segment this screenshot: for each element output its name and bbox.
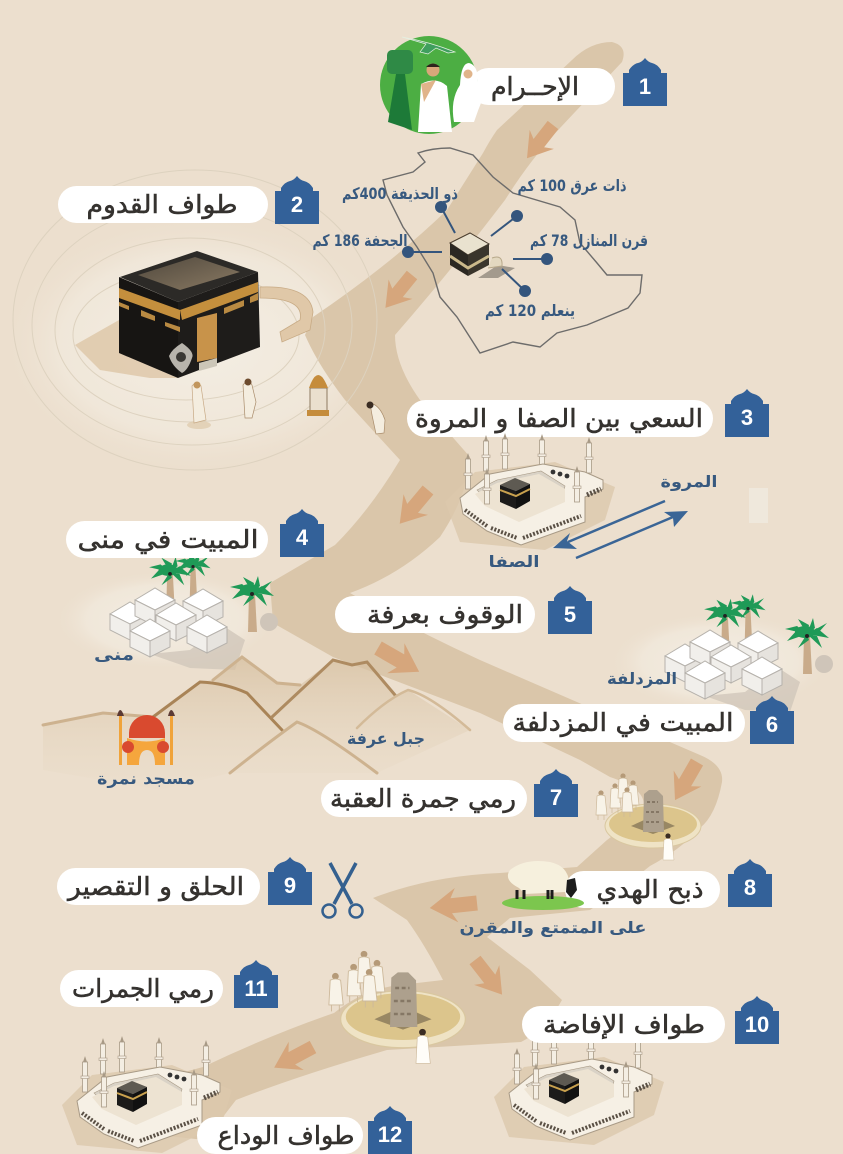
pilgrimage route path — [110, 42, 722, 1140]
map of miqat distances: ذو الحذيفة 400كم — [342, 184, 458, 203]
faint mark — [749, 488, 768, 523]
icon: scissors — [322, 863, 362, 918]
badge: 8: 8 — [744, 875, 756, 900]
badge: 3: 3 — [741, 405, 753, 430]
tawaf circles around the Kaaba — [13, 170, 377, 470]
badge: 1: 1 — [639, 74, 651, 99]
pill: step 2 — [58, 186, 268, 223]
pill: step 4: المبيت في منى — [78, 525, 258, 554]
jamarat small — [596, 773, 701, 860]
map of miqat distances — [312, 148, 648, 353]
pill: step 6 — [503, 704, 745, 742]
badge: 10: 10 — [745, 1012, 769, 1037]
badge: 9 — [268, 857, 312, 905]
map of miqat distances: الجحفة 186 كم — [312, 231, 408, 250]
note under step 8: على المتمتع والمقرن — [460, 918, 646, 937]
pill: step 7 — [321, 780, 527, 817]
badge: 2: 2 — [291, 192, 303, 217]
pill: step 10: طواف الإفاضة — [543, 1010, 705, 1039]
badge: 6 — [750, 696, 794, 744]
badge: 2 — [275, 176, 319, 224]
badge: 10 — [735, 996, 779, 1044]
pill: step 2: طواف القدوم — [86, 190, 238, 220]
icon: ihram pilgrims with airport tower and plane — [380, 36, 483, 134]
map of miqat distances: قرن المنازل 78 كم — [530, 231, 648, 250]
mosque: sa'i section — [445, 433, 615, 550]
pill: step 12 — [197, 1117, 363, 1154]
sa'i arrows — [553, 501, 688, 558]
pill: step 4 — [66, 521, 268, 558]
Kaaba illustration — [119, 251, 313, 378]
pill: step 3: السعي بين الصفا و المروة — [415, 404, 703, 434]
label: Namira mosque: مسجد نمرة — [97, 769, 195, 788]
pill: step 12: طواف الوداع — [218, 1121, 354, 1150]
Mina tents — [53, 552, 278, 670]
mosque: farewell — [62, 1036, 232, 1153]
pill: step 10 — [522, 1006, 725, 1043]
Muzdalifah tents — [608, 594, 833, 712]
label: Muzdalifah: المزدلفة — [607, 669, 677, 688]
pilgrims and lamp in tawaf — [187, 375, 385, 434]
pill: step 6: المبيت في المزدلفة — [512, 708, 734, 737]
label: Safa: الصفا — [488, 552, 540, 571]
pill: step 8 — [565, 871, 720, 908]
badge: 12 — [368, 1106, 412, 1154]
pill: step 3 — [407, 400, 713, 437]
badge: 7 — [534, 769, 578, 817]
pill: step 5 — [335, 596, 535, 633]
badge: 9: 9 — [284, 873, 296, 898]
badge: 11 — [234, 960, 278, 1008]
badge: 6: 6 — [766, 712, 778, 737]
mini Kaaba — [450, 233, 502, 276]
pill: step 11 — [60, 970, 223, 1007]
pill: step 1 — [470, 68, 615, 105]
badge: 1 — [623, 58, 667, 106]
pill: step 1: الإحــرام — [491, 72, 579, 101]
badge: 4 — [280, 509, 324, 557]
arrows along route — [267, 116, 711, 1082]
Namira mosque — [117, 710, 175, 765]
icon: sheep — [502, 861, 584, 910]
label: Marwa: المروة — [660, 472, 718, 491]
badge: 7: 7 — [550, 785, 562, 810]
pill: step 11: رمي الجمرات — [72, 974, 214, 1003]
tawaf floor glow — [0, 215, 400, 475]
badge: 4: 4 — [296, 525, 309, 550]
label: Mina: منى — [94, 645, 134, 664]
mosque: Ifadah — [494, 1028, 664, 1145]
map of miqat distances: ينعلم 120 كم — [485, 301, 575, 320]
mountains of Arafat — [43, 657, 470, 790]
map spokes — [403, 202, 552, 296]
pill: step 9 — [57, 868, 260, 905]
badge: 5: 5 — [564, 602, 576, 627]
pill: step 5: الوقوف بعرفة — [367, 600, 523, 629]
label: Mount Arafat: جبل عرفة — [347, 729, 425, 748]
pill: step 7: رمي جمرة العقبة — [330, 784, 516, 813]
pill: step 9: الحلق و التقصير — [66, 872, 244, 902]
badge: 11: 11 — [244, 976, 268, 1001]
badge: 5 — [548, 586, 592, 634]
jamarat large — [329, 951, 465, 1063]
map of miqat distances: ذات عرق 100 كم — [518, 176, 626, 195]
pill: step 8: ذبح الهدي — [596, 875, 704, 905]
badge: 3 — [725, 389, 769, 437]
badge: 12: 12 — [378, 1122, 402, 1147]
badge: 8 — [728, 859, 772, 907]
